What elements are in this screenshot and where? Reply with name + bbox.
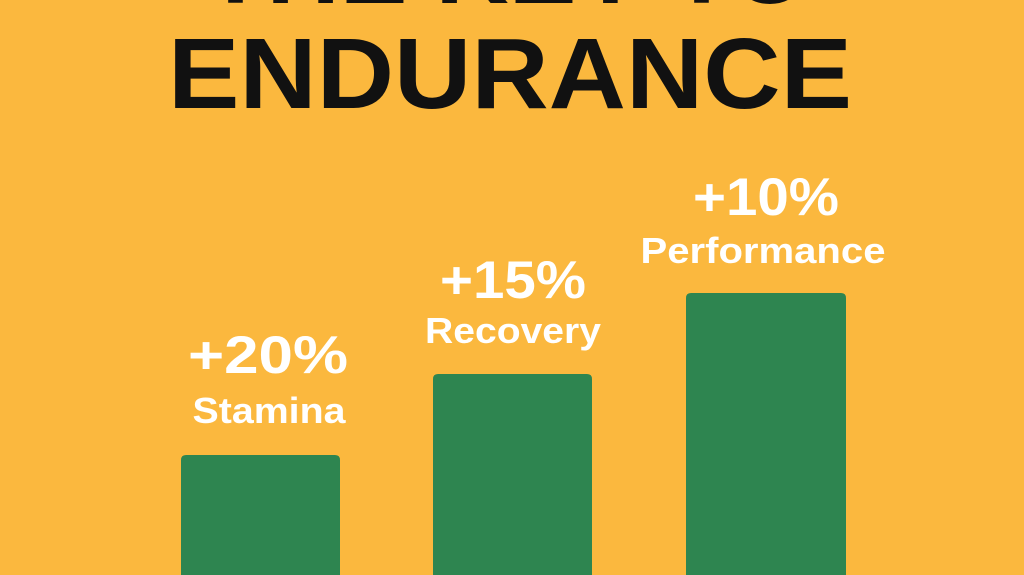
bar chart [181,168,886,575]
bar: stamina [181,326,348,575]
bar: performance [640,168,886,575]
bar: recovery [425,251,601,575]
bar: performance: Performance [640,230,886,271]
bar: stamina: Stamina [192,390,347,431]
bar: recovery: Recovery [425,310,601,351]
title: ENDURANCE [168,18,852,130]
bar: stamina: +20% [188,326,348,385]
bar: recovery: +15% [440,251,586,310]
bar: performance: +10% [693,168,839,227]
